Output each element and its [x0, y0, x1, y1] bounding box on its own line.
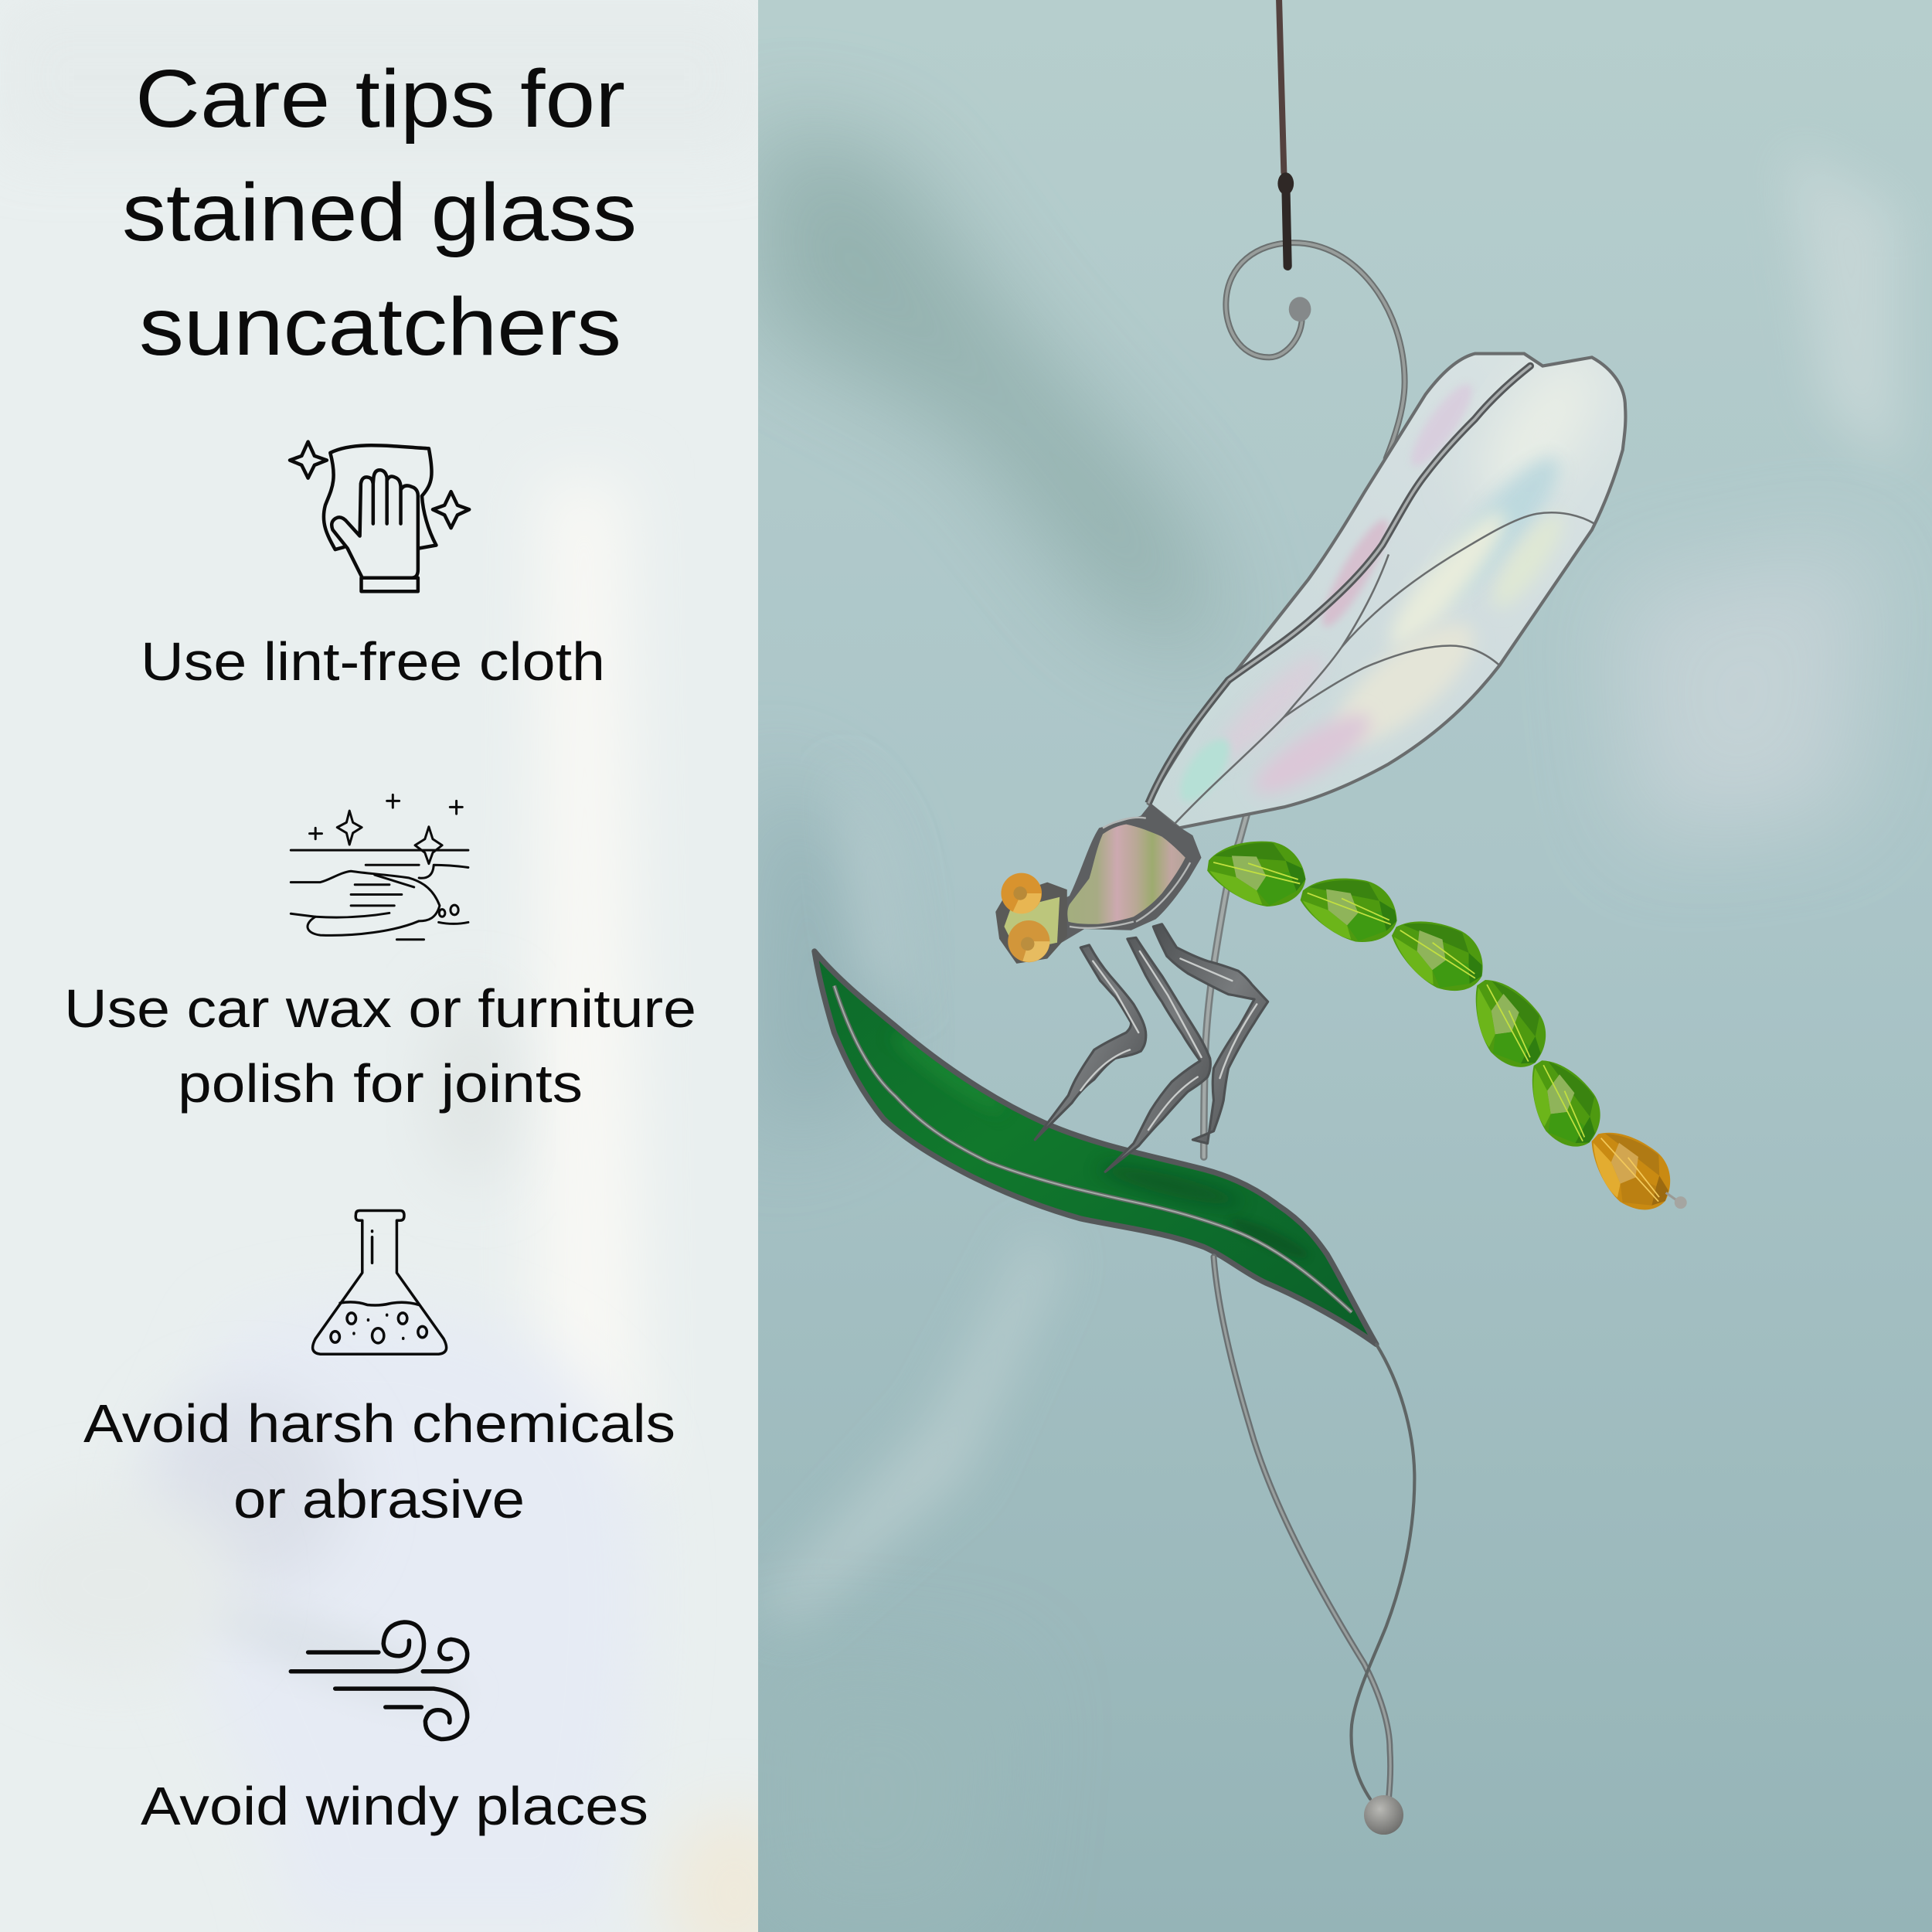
lower twisted wires — [1213, 1257, 1414, 1799]
thorax — [1047, 804, 1202, 949]
label: use car wax or furniture polish — [64, 978, 696, 1114]
legs — [1035, 924, 1268, 1172]
head and eyes — [995, 873, 1067, 964]
icon: hand polishing surface — [291, 794, 468, 940]
title: stained glass — [122, 167, 637, 258]
suncatcher dragonfly — [815, 0, 1687, 1835]
solder ball — [1364, 1795, 1403, 1835]
label: avoid windy places: Avoid windy places — [141, 1776, 648, 1836]
icon: wind — [291, 1622, 468, 1739]
icon: chemical flask — [313, 1210, 447, 1354]
amber tail bead — [1574, 1114, 1687, 1224]
label: use lint-free cloth: Use lint-free cloth — [141, 631, 605, 692]
icon: hand with cloth — [290, 442, 469, 591]
hanging rod — [1277, 0, 1294, 266]
photo background — [752, 0, 1932, 1932]
label: avoid harsh chemicals: or abrasive — [233, 1469, 525, 1529]
label: use car wax or furniture polish: Use car wax or furniture — [64, 978, 696, 1039]
label: use car wax or furniture polish: polish for joints — [178, 1053, 583, 1114]
support stem behind wing — [1204, 536, 1358, 1157]
spiral hook wire — [1226, 243, 1405, 458]
label: avoid harsh chemicals: Avoid harsh chemicals — [83, 1393, 675, 1454]
abdomen beads — [1203, 834, 1614, 1159]
title — [124, 68, 634, 355]
title: Care tips for — [135, 53, 625, 145]
green glass leaf — [815, 951, 1376, 1344]
label: avoid harsh chemicals — [83, 1393, 675, 1529]
panel: care tips — [0, 0, 804, 1932]
iridescent wing — [1148, 339, 1625, 828]
title: suncatchers — [139, 281, 621, 372]
